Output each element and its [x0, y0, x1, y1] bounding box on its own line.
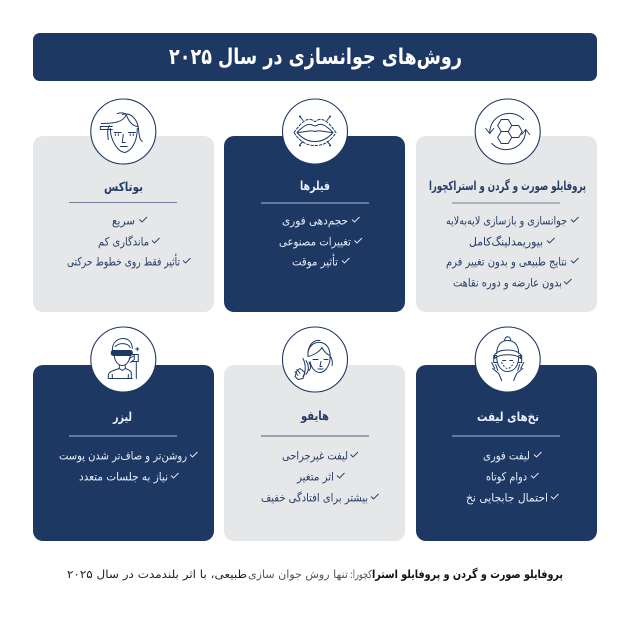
panel: lifting threads — [416, 365, 597, 541]
list: hifu benefits — [261, 448, 378, 506]
list: laser benefits: نیاز به جلسات متعدد — [79, 470, 168, 484]
list: fillers benefits — [279, 214, 362, 270]
icon: hifu face — [282, 327, 348, 392]
footer conclusion text: تنها روش جوان سازی — [248, 568, 348, 581]
panel: profilo and structura — [416, 136, 597, 312]
list: botox benefits — [67, 214, 190, 270]
list: botox benefits: سریع — [112, 214, 135, 228]
footer conclusion text: پروفایلو صورت و گردن و پروفایلو استرا — [372, 567, 563, 582]
list: hifu benefits: بیشتر برای افتادگی خفیف — [261, 490, 368, 506]
list: profilo benefits: بیوریمدلینگ‌کامل — [469, 234, 543, 250]
list: thread benefits: لیفت فوری — [483, 448, 530, 464]
list: fillers benefits: تغییرات مصنوعی — [279, 234, 351, 250]
list: fillers benefits: تأثیر موقت — [292, 254, 338, 270]
title banner — [33, 33, 597, 81]
footer conclusion text: طبیعی، با اثر بلندمدت در سال ۲۰۲۵ — [67, 568, 247, 581]
title: روش‌های جوانسازی در سال ۲۰۲۵ — [169, 45, 462, 70]
icon: face lift with hands — [475, 327, 540, 392]
list: laser benefits — [59, 448, 198, 484]
panel: botox — [33, 136, 214, 312]
icon: lips — [282, 99, 348, 164]
panel: laser — [33, 365, 214, 541]
heading: botox: بوتاکس — [104, 179, 143, 194]
list: hifu benefits: لیفت غیرجراحی — [282, 448, 348, 464]
list: profilo benefits: نتایج طبیعی و بدون تغییر فرم — [446, 254, 567, 270]
icon: laser treatment — [91, 327, 156, 392]
panel: fillers — [224, 136, 405, 312]
icon: botox face — [91, 99, 156, 164]
list: laser benefits: روشن‌تر و صاف‌تر شدن پوست — [59, 448, 187, 464]
list: profilo benefits: جوانسازی و بازسازی لایه‌به‌لایه — [446, 214, 567, 228]
list: botox benefits: تأثیر فقط روی خطوط حرکتی — [67, 254, 180, 270]
list: profilo benefits — [446, 214, 578, 290]
list: fillers benefits: حجم‌دهی فوری — [282, 214, 348, 228]
heading: laser: لیزر — [112, 409, 132, 424]
footer conclusion text: کچورا: — [350, 568, 373, 581]
list: thread benefits: دوام کوتاه — [486, 470, 527, 484]
heading: fillers: فیلرها — [300, 178, 330, 193]
icon: honeycomb molecules — [475, 99, 540, 164]
footer conclusion text — [67, 567, 563, 582]
list: botox benefits: ماندگاری کم — [98, 234, 149, 250]
list: hifu benefits: اثر متغیر — [296, 470, 334, 484]
heading: hifu: هایفو — [300, 408, 329, 423]
list: thread benefits: احتمال جابجایی نخ — [466, 490, 548, 504]
list: thread benefits — [466, 448, 558, 504]
list: profilo benefits: بدون عارضه و دوره نقاهت — [453, 276, 562, 290]
heading: lifting threads: نخ‌های لیفت — [477, 409, 539, 424]
panel: hifu — [224, 365, 405, 541]
